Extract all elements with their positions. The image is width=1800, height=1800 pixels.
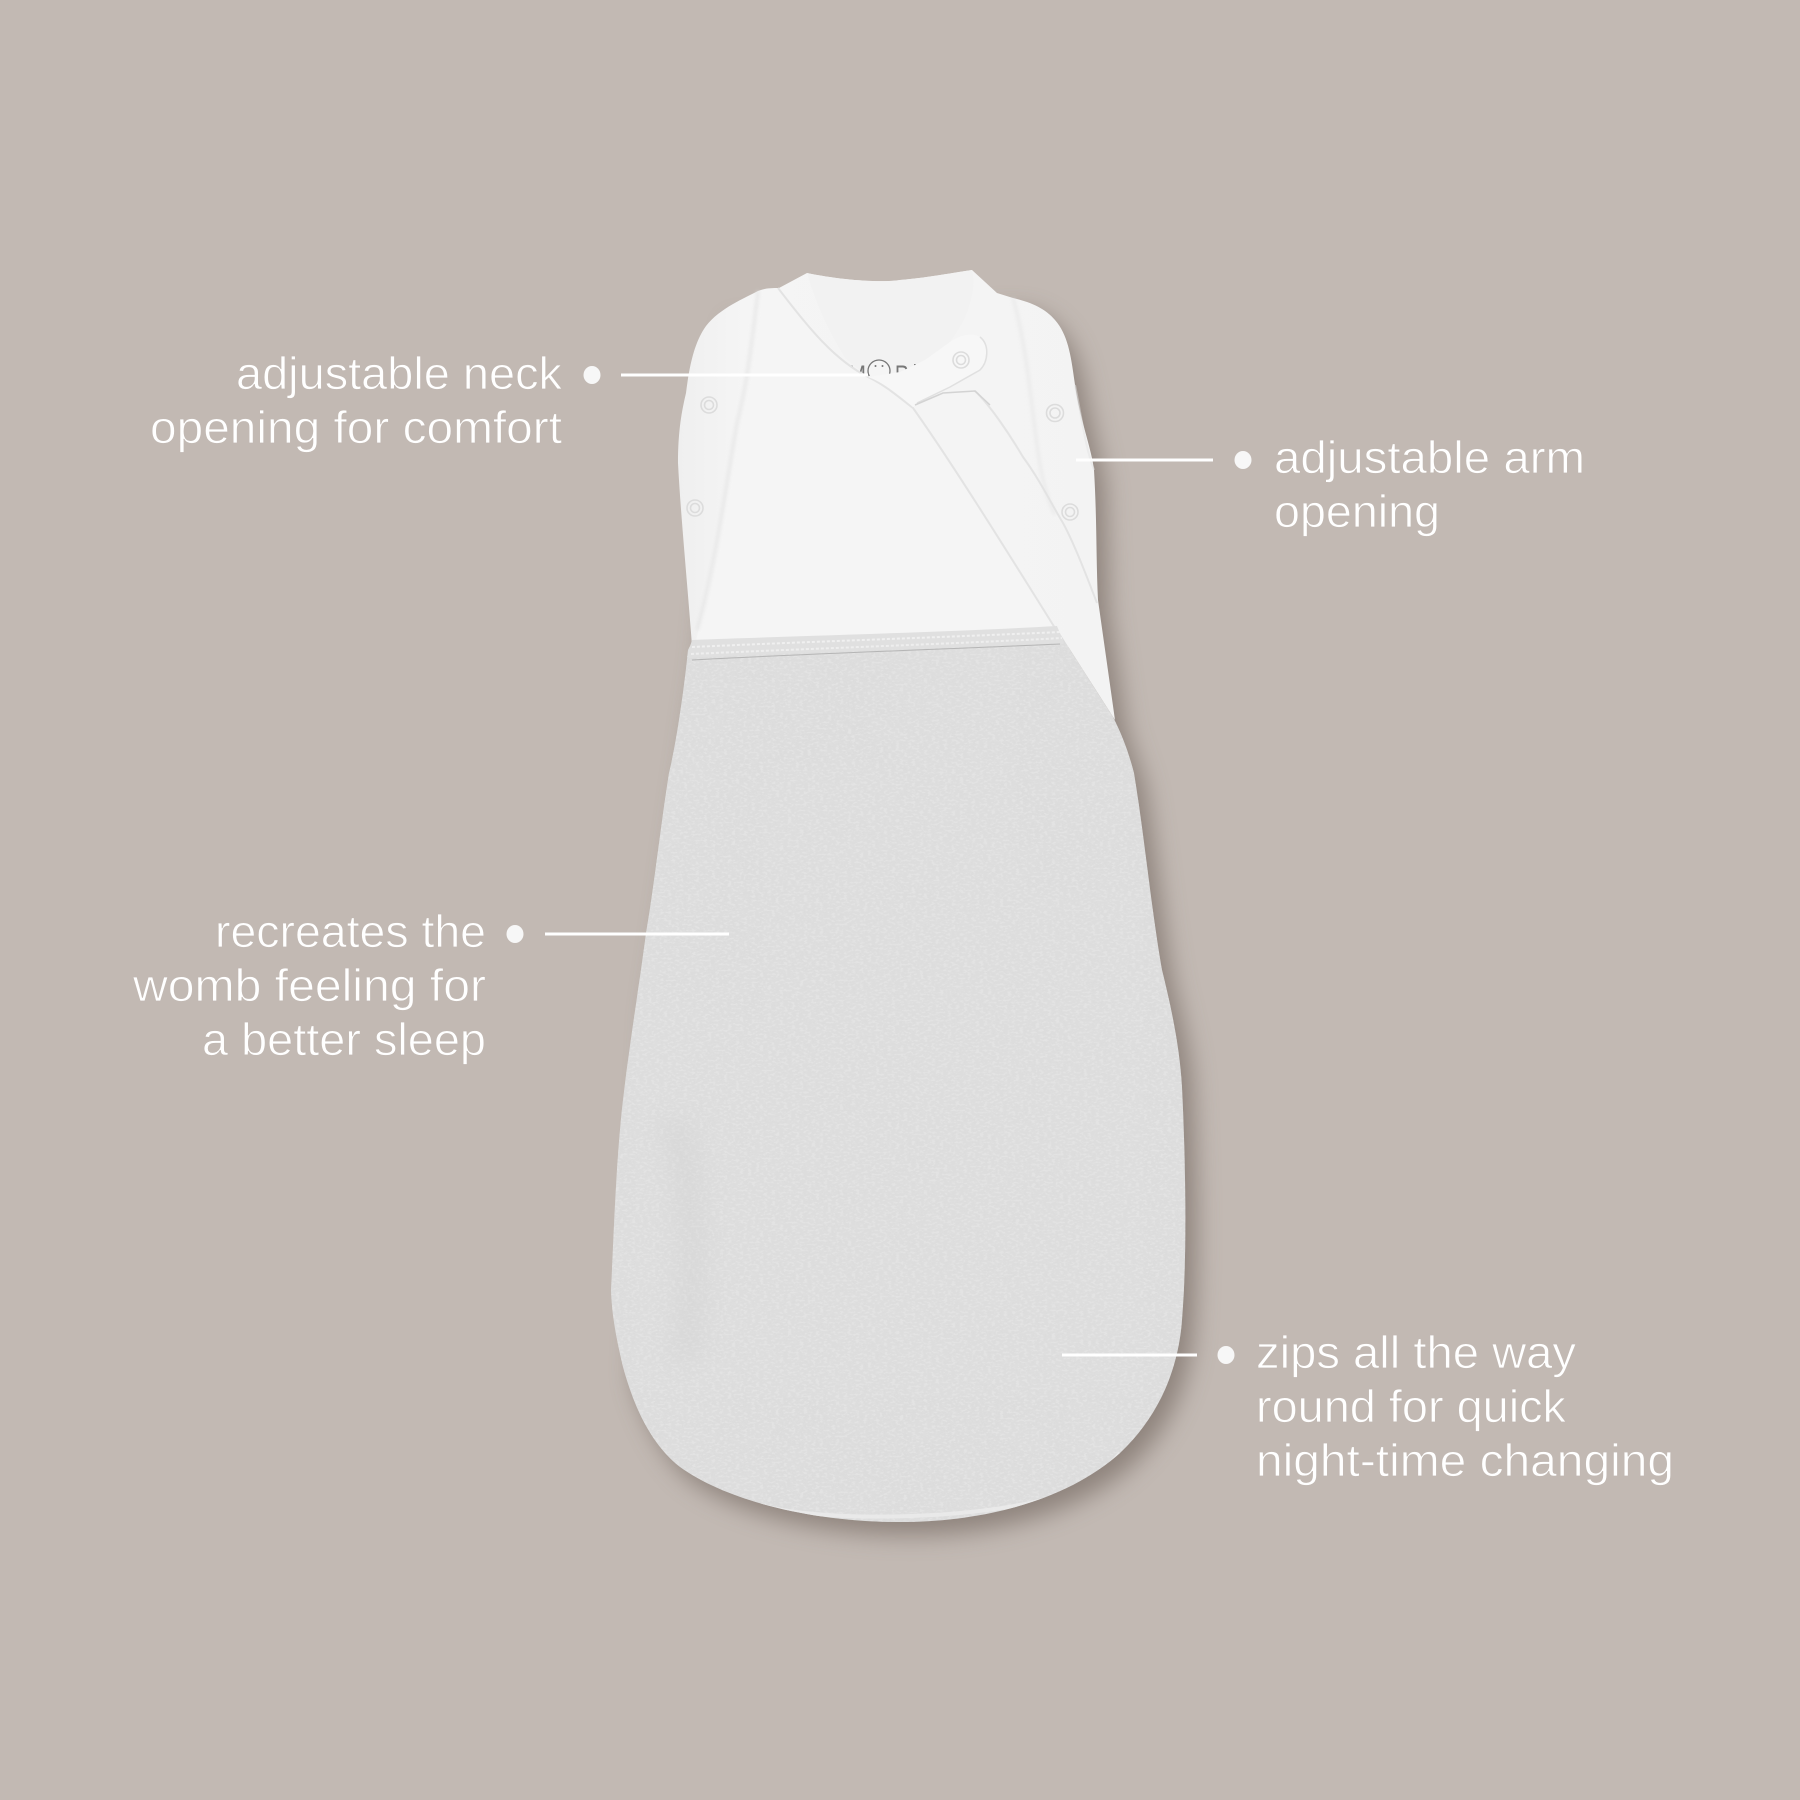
logo on neck label xyxy=(851,359,916,376)
wrap flap xyxy=(695,288,1055,645)
callout: womb feeling xyxy=(132,906,729,1065)
fold lines xyxy=(697,288,1097,630)
callout text: zip: round for quick xyxy=(1256,1381,1567,1432)
white panel outline xyxy=(678,270,1115,720)
infographic: swaddle sleep bag with feature callouts xyxy=(134,270,1670,1548)
logo on neck label: M xyxy=(848,360,866,390)
leader line: neck xyxy=(621,374,868,376)
callout dot: zip xyxy=(1218,1346,1234,1364)
left gather shading xyxy=(660,1120,704,1360)
callout text: zip: night-time changing xyxy=(1256,1435,1674,1486)
heather grey body xyxy=(611,634,1186,1522)
callout text: womb: a better sleep xyxy=(202,1014,486,1065)
callout: zips all the way round xyxy=(1062,1327,1674,1486)
callout text: womb: womb feeling for xyxy=(132,960,486,1011)
leader line: arm xyxy=(1076,458,1213,462)
ribbed waist band xyxy=(687,626,1064,660)
snaps xyxy=(687,352,1078,520)
callout text: neck xyxy=(150,348,563,453)
callout dot: womb xyxy=(506,925,524,943)
callout: adjustable neck opening xyxy=(150,348,868,453)
callout text: womb xyxy=(132,906,486,1065)
callout text: zip: zips all the way xyxy=(1256,1327,1577,1378)
garment shadow xyxy=(634,311,1196,1535)
leader line: womb xyxy=(545,932,729,936)
callout text: zip xyxy=(1256,1327,1674,1486)
logo on neck label: R xyxy=(895,360,909,390)
callout text: neck: opening for comfort xyxy=(150,402,563,453)
callout: adjustable arm opening xyxy=(1076,432,1585,537)
callout text: womb: recreates the xyxy=(215,906,486,957)
callout text: arm: opening xyxy=(1274,486,1440,537)
leader line: zip xyxy=(1062,1354,1197,1356)
callout text: arm xyxy=(1274,432,1585,537)
bottom hem xyxy=(760,1453,1120,1517)
garment: swaddle sleep bag xyxy=(590,270,1200,1540)
neck inner collar xyxy=(807,270,973,377)
callout text: neck: adjustable neck xyxy=(236,348,563,399)
neck snap tab xyxy=(868,335,990,407)
callout text: arm: adjustable arm xyxy=(1274,432,1585,483)
white upper swaddle xyxy=(678,270,1115,720)
callout dot: neck xyxy=(584,366,600,384)
callout dot: arm xyxy=(1234,451,1252,469)
